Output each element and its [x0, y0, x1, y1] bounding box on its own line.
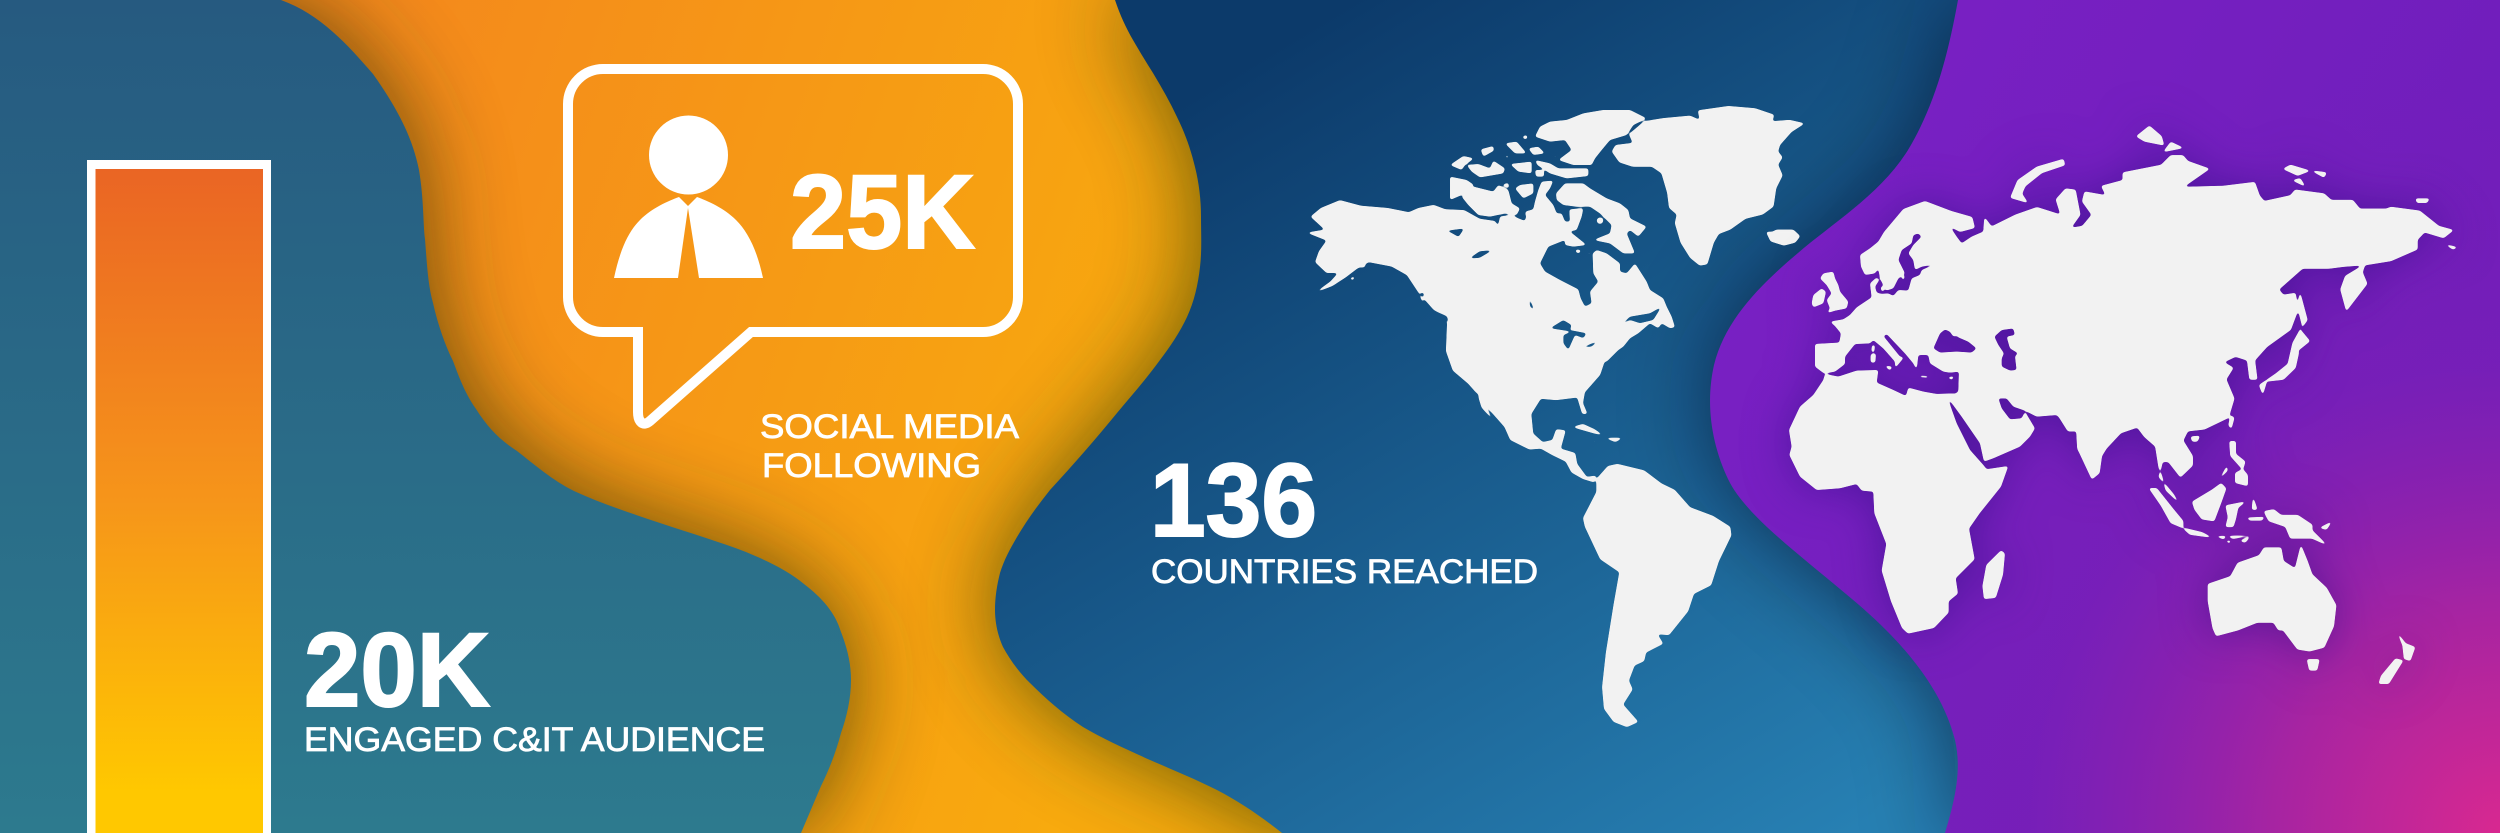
- panel: purple region: [1710, 0, 2500, 833]
- speech bubble: [568, 69, 1018, 424]
- stat: 20K engaged audience: ENGAGED C&IT AUDIENCE: [304, 721, 765, 759]
- map: Eurasia, Africa and Oceania: [1789, 126, 2457, 684]
- label: social media following: [760, 408, 1019, 485]
- stat: 25K: 25K: [790, 154, 975, 271]
- gradient bar: [87, 160, 271, 833]
- icon: person: [614, 116, 763, 278]
- shadow of blue panel: [995, 0, 2500, 833]
- map: Americas and Greenland: [1307, 106, 1805, 727]
- stat: 136 countries reached: 136: [1150, 443, 1317, 559]
- stat: 136 countries reached: [1150, 443, 1538, 591]
- panel: blue region: [995, 0, 2500, 833]
- stat: 136 countries reached: COUNTRIES REACHED: [1151, 553, 1538, 591]
- shadow of teal panel: [0, 0, 851, 833]
- stat: 20K engaged audience: [304, 612, 765, 759]
- panel: teal left region: [0, 0, 851, 833]
- shadow of purple panel: [1710, 0, 2500, 833]
- stat: 20K engaged audience: 20K: [304, 612, 490, 729]
- label: social media following: FOLLOWING: [762, 447, 981, 485]
- label: social media following: SOCIAL MEDIA: [760, 408, 1019, 446]
